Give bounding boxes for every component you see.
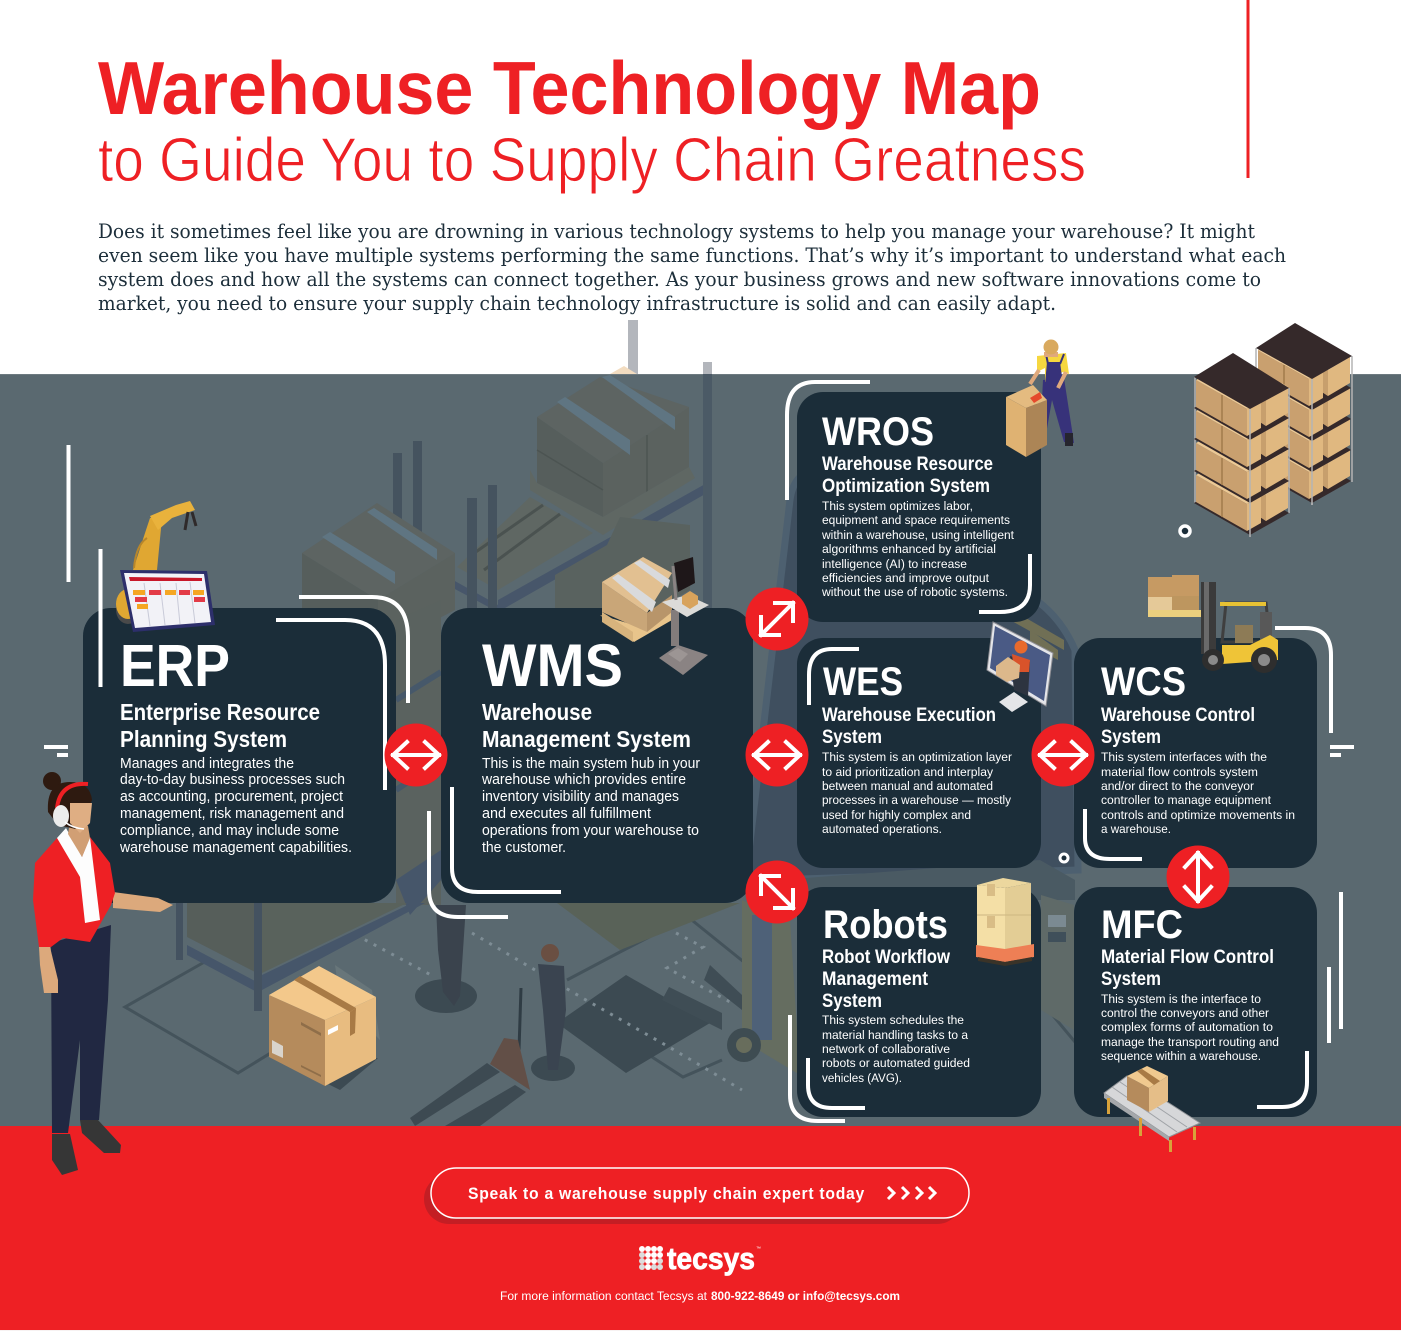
- panel: WROS: WROS: [822, 410, 934, 454]
- panel: ERP: warehouse management capabilities.: [119, 840, 352, 856]
- footer contact line: For more information contact Tecsys at: [500, 1289, 708, 1303]
- panel: Robots: [797, 887, 1041, 1117]
- arrow: WCS to MFC: [1166, 846, 1230, 908]
- panel: WROS: algorithms enhanced by artificial: [822, 542, 996, 556]
- background: warehouse floor band: [0, 374, 1401, 1126]
- panel: WROS: intelligence (AI) to increase: [822, 557, 967, 571]
- panel: WROS: efficiencies and improve output: [822, 571, 990, 585]
- title: to Guide You to Supply Chain Greatness: [98, 126, 1086, 195]
- intro paragraph: Does it sometimes feel like you are drowning in various technology systems to help you manage your warehouse? It might: [98, 220, 1255, 243]
- panel: WROS: without the use of robotic systems.: [821, 585, 1008, 599]
- panel: WES: System: [822, 726, 882, 748]
- panel: MFC: MFC: [1101, 903, 1183, 947]
- shelf pallet: [530, 467, 695, 535]
- icon: monitor with worker: [987, 622, 1053, 712]
- panel: WES: [797, 638, 1041, 868]
- icon: forklift with pallet: [1148, 575, 1278, 673]
- panel: WES: processes in a warehouse — mostly: [822, 793, 1012, 807]
- intro paragraph: market, you need to ensure your supply chain technology infrastructure is solid and can easily adapt.: [98, 292, 1056, 315]
- icon: box on conveyor: [1104, 1066, 1200, 1152]
- icon: robot carrying boxes: [976, 878, 1034, 966]
- panel: WES: This system is an optimization layer: [822, 750, 1012, 764]
- panel: MFC: [1074, 887, 1317, 1117]
- panel: ERP: Planning System: [120, 726, 287, 752]
- panel: Robots: Management: [822, 968, 928, 990]
- panel: WMS: Warehouse: [482, 699, 592, 725]
- panel: WMS: This is the main system hub in your: [482, 756, 700, 772]
- panel: WES: used for highly complex and: [822, 808, 971, 822]
- panel: ERP: ERP: [120, 633, 230, 699]
- panel: MFC: System: [1101, 968, 1161, 990]
- panel: Robots: This system schedules the: [822, 1013, 964, 1027]
- panel: Robots: network of collaborative: [822, 1042, 950, 1056]
- panel: WCS: controller to manage equipment: [1101, 793, 1272, 807]
- forklift bottom: [742, 900, 800, 1075]
- title: Warehouse Technology Map: [98, 46, 1041, 130]
- intro paragraph: [98, 220, 1286, 315]
- panel: WROS: within a warehouse, using intelligent: [821, 528, 1015, 542]
- panel: Robots: robots or automated guided: [822, 1056, 970, 1070]
- middle column boxes: [396, 600, 441, 905]
- panel: WMS: inventory visibility and manages: [482, 789, 679, 805]
- arrow: WMS to Robots: [746, 860, 808, 924]
- panel: WCS: System: [1101, 726, 1161, 748]
- panel: WCS: controls and optimize movements in: [1101, 808, 1295, 822]
- forklift cabin behind panels: [745, 470, 1078, 885]
- icon: storage shelving racks: [1194, 323, 1352, 537]
- panel: ERP: Enterprise Resource: [120, 699, 320, 725]
- lower shelf boxes: [555, 517, 690, 630]
- panel: MFC: This system is the interface to: [1101, 992, 1261, 1006]
- arrow: WES to WCS: [1032, 724, 1094, 786]
- panel: WCS: [1074, 638, 1317, 868]
- panel: MFC: manage the transport routing and: [1101, 1035, 1279, 1049]
- panel: MFC: control the conveyors and other: [1101, 1006, 1269, 1020]
- panel: ERP: Manages and integrates the: [120, 756, 294, 772]
- figure: call-centre woman: [33, 772, 173, 1175]
- panel: WROS: Optimization System: [822, 475, 990, 497]
- panel: ERP: management, risk management and: [120, 806, 344, 822]
- panel: WMS: [441, 608, 753, 903]
- marker dots: [1060, 526, 1190, 862]
- arrow: WMS to WES: [746, 724, 808, 786]
- panel: Robots: System: [822, 990, 882, 1012]
- logo: tecsys: ™: [756, 1246, 761, 1252]
- intro paragraph: system does and how all the systems can connect together. As your business grows and new software innovations come to: [98, 268, 1261, 291]
- panel: WCS: This system interfaces with the: [1101, 750, 1267, 764]
- panel: MFC: Material Flow Control: [1101, 946, 1274, 968]
- panel: Robots: Robots: [823, 903, 948, 947]
- panel: WES: Warehouse Execution: [822, 704, 996, 726]
- right-hand gap: [1041, 895, 1074, 1030]
- panel: WROS: [797, 392, 1041, 622]
- panel: ERP: day-to-day business processes such: [120, 772, 345, 788]
- dim worker with headset: [415, 979, 477, 1013]
- footer contact line: 800-922-8649 or info@tecsys.com: [711, 1289, 900, 1303]
- panel: WCS: a warehouse.: [1101, 822, 1171, 836]
- panel: ERP: as accounting, procurement, project: [120, 789, 343, 805]
- panel: WMS: Management System: [482, 726, 691, 752]
- call to action button: Speak to a warehouse supply chain expert today: [468, 1184, 865, 1203]
- lower rack: [187, 903, 257, 973]
- panel: WES: automated operations.: [822, 822, 942, 836]
- dim pallet truck and worker: [531, 1055, 575, 1081]
- panel: MFC: sequence within a warehouse.: [1101, 1049, 1261, 1063]
- call to action button: [424, 1168, 969, 1224]
- panel: WROS: equipment and space requirements: [822, 513, 1010, 527]
- arrow: ERP to WMS: [384, 724, 448, 786]
- title: [98, 46, 1086, 195]
- panel: WCS: Warehouse Control: [1101, 704, 1255, 726]
- rack posts: [393, 453, 402, 543]
- logo: tecsys: tecsys: [667, 1241, 755, 1276]
- panel: WES: between manual and automated: [822, 779, 993, 793]
- icon: pallet and scanner station: [600, 557, 709, 675]
- panel: WMS: warehouse which provides entire: [481, 772, 686, 788]
- red footer band: [0, 1126, 1401, 1331]
- panel: Robots: material handling tasks to a: [822, 1028, 968, 1042]
- panel: Robots: vehicles (AVG).: [822, 1071, 902, 1085]
- panel: WES: to aid prioritization and interplay: [822, 765, 994, 779]
- panel: WCS: and/or direct to the conveyor: [1101, 779, 1254, 793]
- panel: WMS: the customer.: [482, 840, 566, 856]
- panel: WCS: material flow controls system: [1101, 765, 1258, 779]
- panel: WES: WES: [823, 660, 903, 704]
- rack posts rising above the band: [610, 320, 712, 376]
- panel: WMS: WMS: [482, 632, 623, 699]
- panel: ERP: [83, 608, 396, 903]
- arrow: WMS to WROS: [746, 588, 808, 650]
- panel: ERP: compliance, and may include some: [120, 823, 339, 839]
- upper stacked box: [537, 417, 603, 517]
- left box stack: [302, 553, 378, 650]
- panel: WROS: Warehouse Resource: [822, 453, 993, 475]
- panel: WMS: operations from your warehouse to: [482, 823, 699, 839]
- footer contact line: [500, 1289, 900, 1303]
- floor markings: [125, 917, 1090, 1077]
- panel: WCS: WCS: [1101, 660, 1186, 704]
- panel: MFC: complex forms of automation to: [1101, 1020, 1273, 1034]
- icon: large cardboard box: [269, 966, 378, 1090]
- intro paragraph: even seem like you have multiple systems performing the same functions. That’s why it’s important to understand what each: [98, 244, 1286, 267]
- icon: robot arm and tablet: [116, 501, 215, 632]
- panel: WMS: and executes all fulfillment: [482, 806, 651, 822]
- panel: Robots: Robot Workflow: [822, 946, 951, 968]
- icon: worker scanning a box: [1006, 340, 1074, 457]
- panel: WROS: This system optimizes labor,: [822, 499, 973, 513]
